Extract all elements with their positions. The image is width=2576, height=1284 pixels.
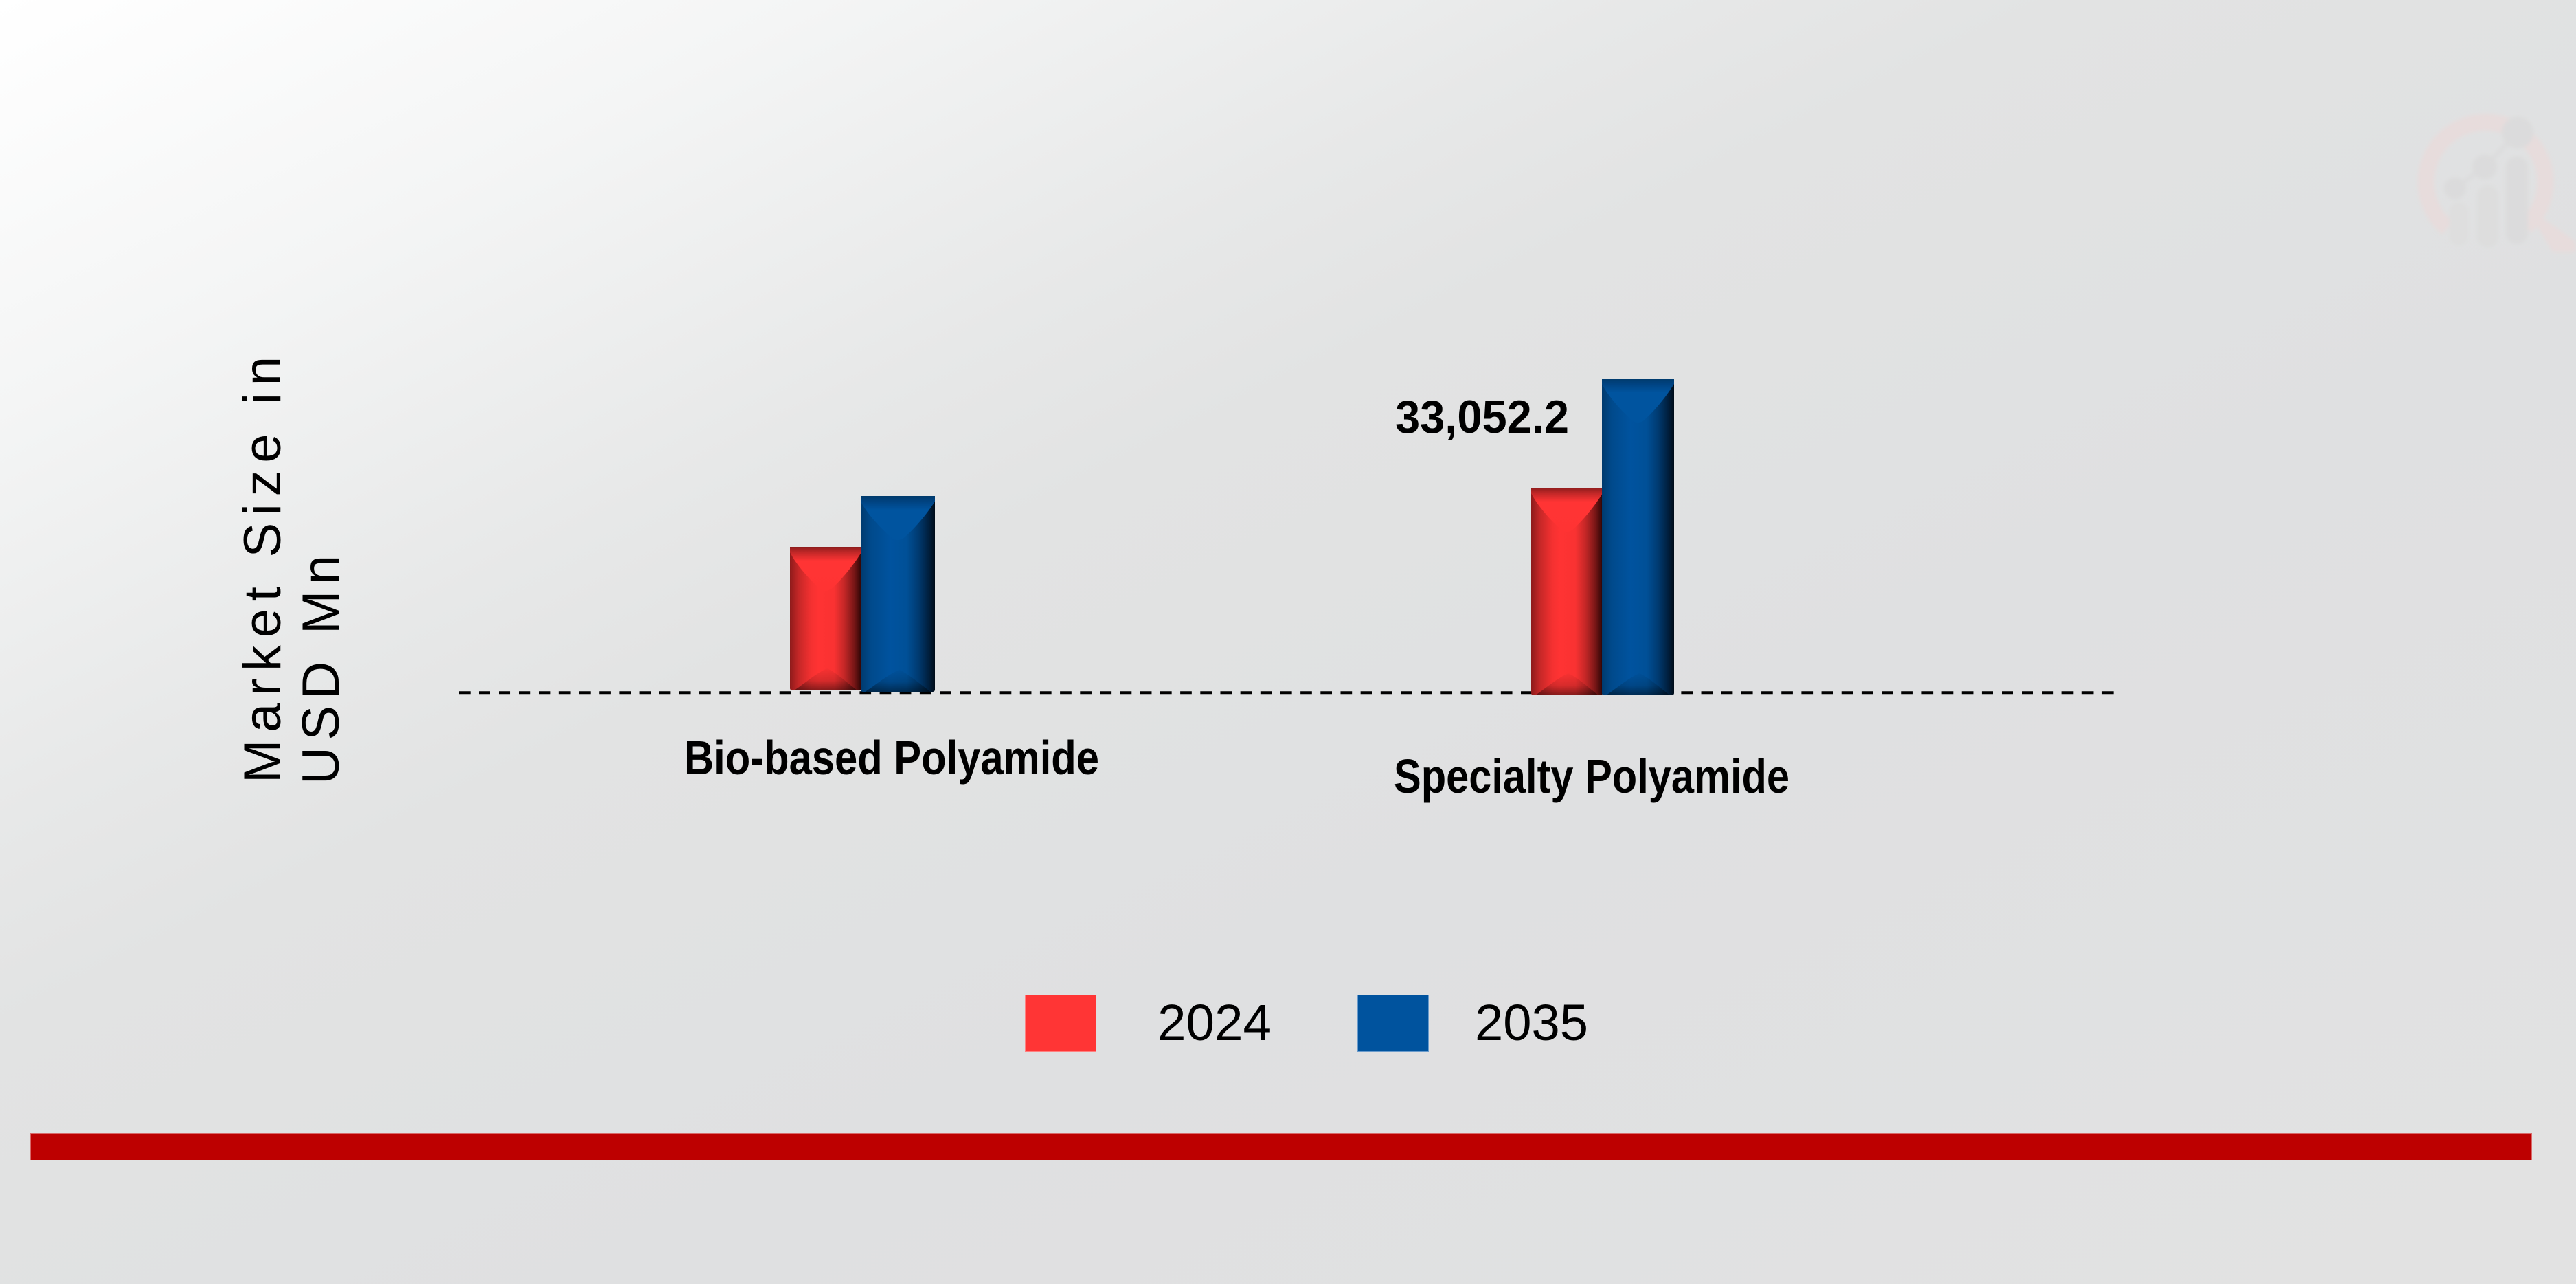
bar: Bio-based Polyamide 2035 (861, 496, 935, 692)
legend label 2024: 2024 (1157, 994, 1272, 1051)
y-axis title: USD Mn (292, 555, 350, 785)
footer red bar (30, 1134, 2532, 1160)
legend label 2035: 2035 (1475, 994, 1588, 1051)
bar chart (459, 379, 2114, 803)
legend (1025, 994, 1588, 1051)
bar: Specialty Polyamide 2035 (1602, 379, 1674, 695)
category label: Specialty Polyamide: Specialty Polyamide (1394, 750, 1789, 803)
y-axis title: Market Size in (234, 357, 292, 783)
y-axis title (234, 357, 350, 785)
category label: Bio-based Polyamide: Bio-based Polyamide (684, 731, 1099, 785)
bar: Specialty Polyamide 2024 (1531, 488, 1603, 695)
data label: 33,052.2 (1395, 391, 1569, 443)
watermark logo (2426, 117, 2576, 252)
bar: Bio-based Polyamide 2024 (790, 547, 861, 690)
legend swatch 2035 (1357, 995, 1429, 1051)
legend swatch 2024 (1025, 995, 1096, 1051)
